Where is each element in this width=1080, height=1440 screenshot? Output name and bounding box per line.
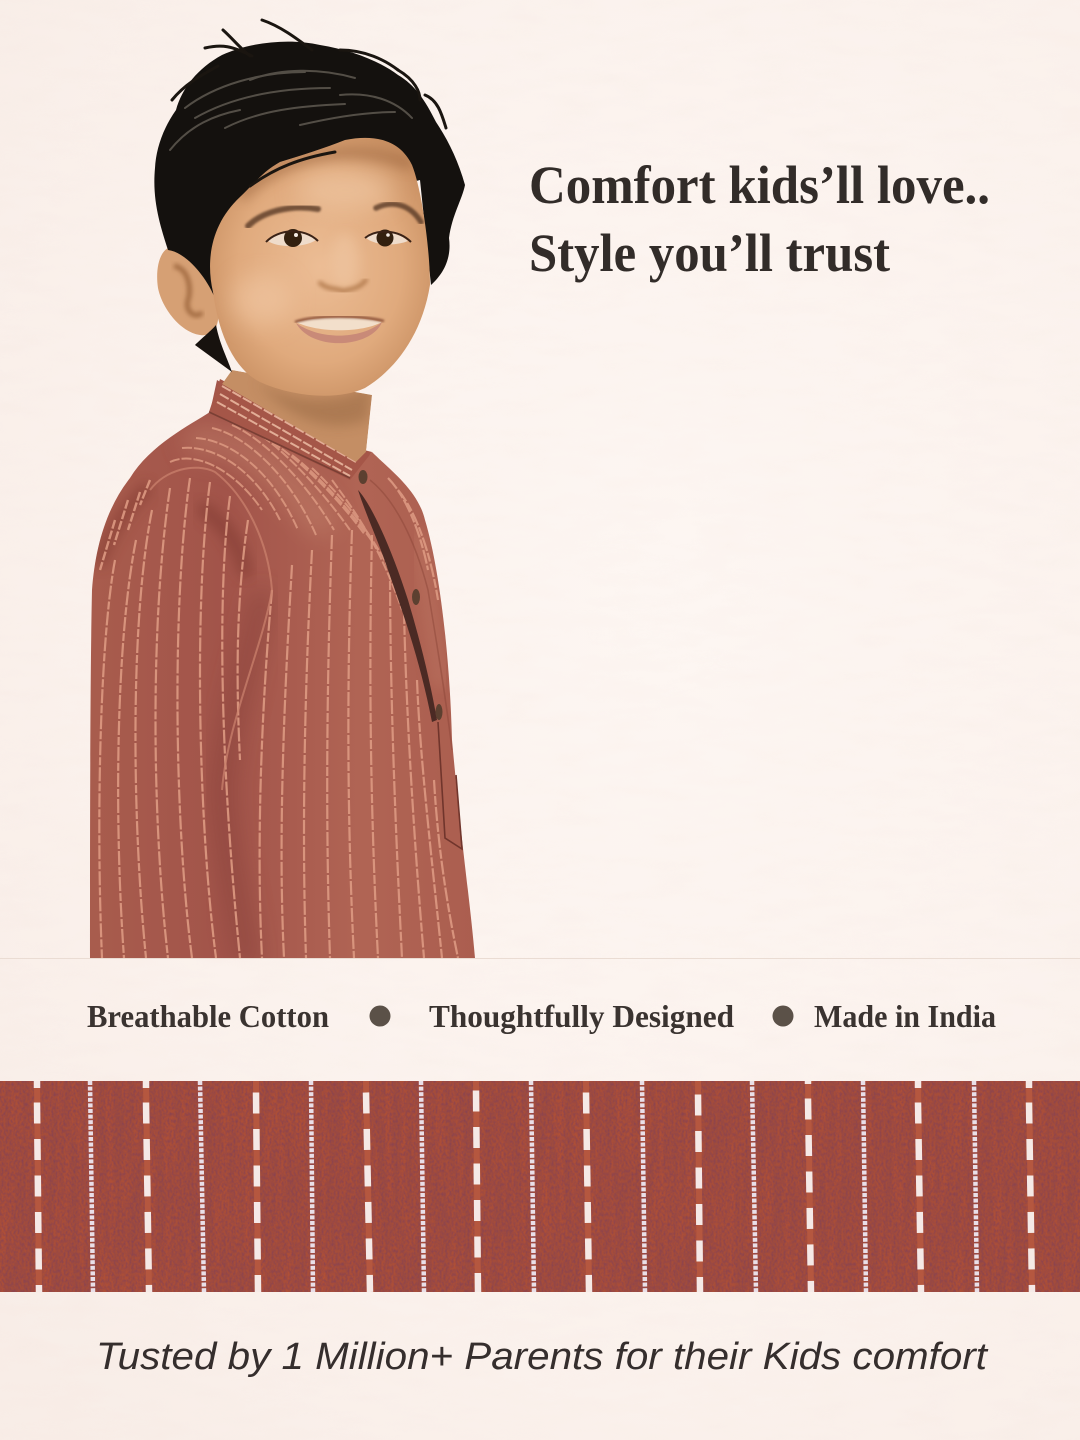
dashed white stitches — [37, 1081, 1032, 1292]
headline: Comfort kids’ll love.. — [529, 155, 990, 215]
eyes — [266, 229, 411, 247]
feature: made in india: Made in India — [814, 998, 996, 1034]
eyebrows — [248, 204, 421, 226]
stitch underlay — [37, 1081, 1032, 1292]
ear — [157, 246, 218, 335]
hair top strands and highlights — [170, 20, 446, 186]
kurta — [90, 379, 475, 958]
dotted white lines — [90, 1081, 977, 1292]
boy in kurta photo — [90, 20, 475, 958]
neck — [222, 370, 372, 462]
stray hair strands — [172, 20, 446, 128]
collar — [209, 379, 372, 480]
nose — [320, 280, 366, 291]
sleeve seam — [150, 468, 272, 790]
trust statement: Tusted by 1 Million+ Parents for their Kids comfort — [96, 1336, 989, 1378]
face — [210, 138, 430, 396]
headline: Style you’ll trust — [529, 223, 890, 283]
bullet — [772, 1006, 794, 1026]
headline — [529, 155, 990, 283]
hair base — [154, 42, 465, 372]
placket and button slit — [358, 480, 462, 849]
sleeve stripes — [99, 478, 248, 958]
fabric swatch band — [0, 1081, 1080, 1292]
buttons — [358, 470, 442, 720]
fabric shading — [100, 440, 440, 958]
body stripes — [260, 478, 458, 958]
feature: breathable cotton: Breathable Cotton — [87, 998, 329, 1034]
section divider line — [0, 958, 1080, 959]
bullet — [370, 1006, 390, 1026]
side panel diagonal stripes — [100, 480, 150, 570]
feature strip — [87, 998, 996, 1034]
yoke stripes — [170, 425, 402, 610]
smile — [295, 317, 384, 343]
feature: thoughtfully designed: Thoughtfully Designed — [429, 998, 734, 1034]
